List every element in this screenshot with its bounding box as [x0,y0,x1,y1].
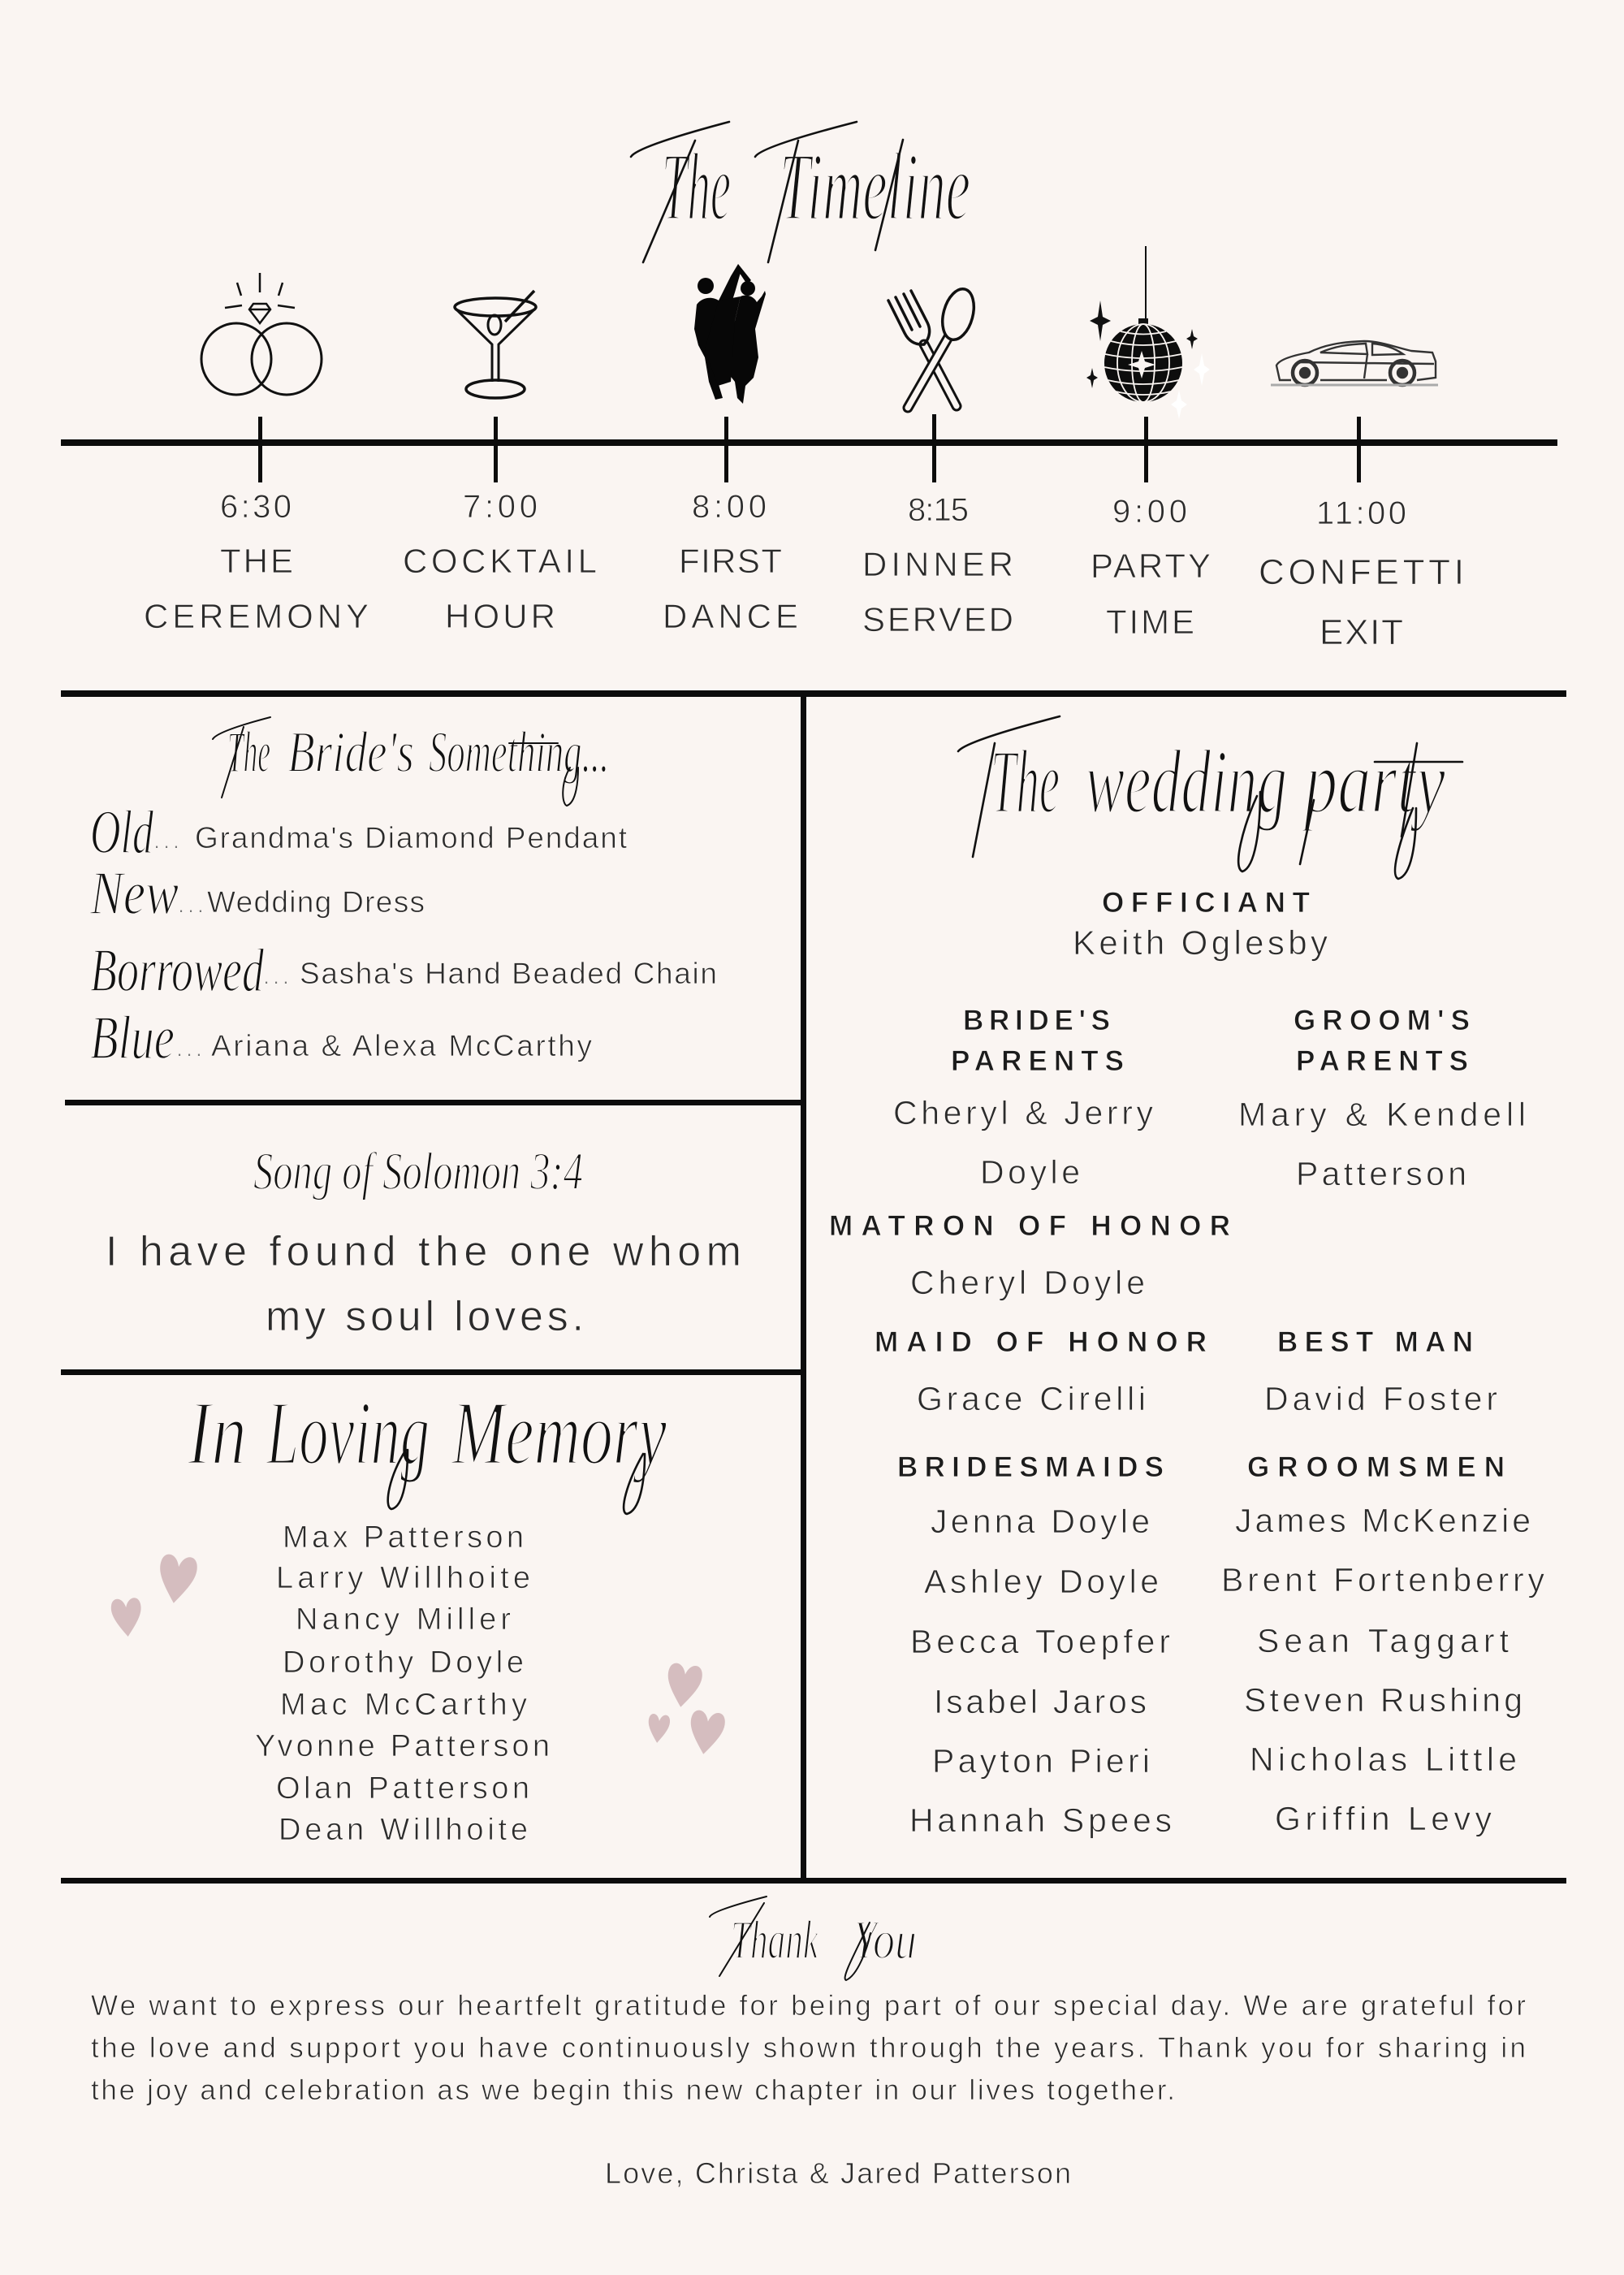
icon: hearts right [646,1662,726,1757]
bridesmaids: Ashley Doyle [924,1563,1159,1600]
heading: The Bride's Something: Bride's [287,720,414,785]
verse text [106,1228,741,1340]
groomsmen: Nicholas Little [1250,1741,1517,1778]
timeline label: first dance [663,489,798,635]
title: The Timeline: Timeline [780,132,970,240]
officiant: Keith Oglesby [1073,923,1328,962]
timeline label: first dance: DANCE [663,597,798,635]
bride's parents: Cheryl & Jerry [893,1094,1153,1131]
timeline label: party time: PARTY [1091,547,1211,585]
panel: the bride's something [89,717,717,1072]
title: The Timeline: The [662,132,731,240]
bridesmaids: Payton Pieri [932,1742,1150,1780]
bridesmaids [897,1451,1172,1839]
panel: thank you [91,1897,1526,2190]
heading: The wedding party: wedding [1085,732,1287,833]
groom's parents: Mary & Kendell [1238,1096,1526,1133]
panel: the wedding party [829,716,1544,1839]
row: old: ... [154,832,179,852]
timeline label: ceremony: THE [220,542,293,580]
best man: David Foster [1264,1380,1497,1417]
panel: scripture [106,1142,741,1340]
names list: Dean Willhoite [279,1813,528,1847]
groomsmen [1221,1451,1544,1837]
row: new: Wedding Dress [207,885,425,919]
names list: Mac McCarthy [280,1688,527,1722]
maid of honor: MAID OF HONOR [875,1326,1207,1358]
bride's parents: PARENTS [951,1045,1124,1077]
row: borrowed [90,936,717,1005]
heading: The Bride's Something: Something... [429,720,609,785]
names list [255,1520,550,1847]
heading: Thank You: You [853,1909,917,1970]
groom's parents [1238,1005,1526,1192]
timeline label: cocktail hour: HOUR [445,597,555,635]
row: blue: Ariana & Alexa McCarthy [211,1029,593,1062]
groom's parents: GROOM'S [1294,1005,1470,1036]
timeline label: first dance: 8:00 [692,489,767,525]
row: new: New [89,859,179,928]
row: blue: ... [177,1040,201,1060]
timeline label: ceremony [144,489,369,635]
icon: wedding rings [201,273,322,395]
thank you paragraph: We want to express our heartfelt gratitude for being part of our special day. We are grateful for [91,1990,1526,2022]
icon: martini glass [455,291,536,398]
heading: Song of Solomon: Song of Solomon 3:4 [253,1142,583,1201]
heading: In Loving Memory: In [187,1383,247,1484]
heading: The wedding party: party [1300,732,1445,833]
timeline axis [61,414,1557,482]
heading: In Loving Memory: Loving [266,1383,430,1484]
groomsmen: Sean Taggart [1257,1622,1510,1659]
timeline label: party time: TIME [1106,603,1194,641]
timeline label: dinner served: DINNER [862,545,1013,583]
timeline label: confetti exit [1259,495,1464,652]
row: borrowed: Borrowed [90,936,265,1005]
best man [1264,1326,1497,1417]
maid of honor [875,1326,1207,1417]
groom's parents: Patterson [1296,1155,1466,1192]
thank you paragraph: the love and support you have continuously shown through the years. Thank you for sharing in [91,2032,1526,2064]
officiant [1073,887,1328,962]
bride's parents: Doyle [980,1153,1080,1191]
heading: The Bride's Something [213,717,609,806]
matron of honor [829,1210,1230,1301]
bridesmaids: Hannah Spees [909,1801,1172,1839]
groom's parents: PARENTS [1296,1045,1468,1077]
timeline label: cocktail hour [403,489,597,635]
row: borrowed: ... [264,967,288,988]
names list: Dorothy Doyle [283,1646,524,1680]
heading: In Loving Memory: Memory [451,1383,667,1484]
signature: Love, Christa & Jared Patterson [605,2156,1071,2190]
heading: The wedding party: The [991,732,1060,833]
timeline label: party time [1091,494,1211,641]
panel: in loving memory [110,1383,726,1847]
matron of honor: Cheryl Doyle [910,1264,1145,1301]
officiant: OFFICIANT [1102,887,1310,919]
heading: Thank You [710,1897,917,1980]
best man: BEST MAN [1277,1326,1473,1358]
timeline label: ceremony: 6:30 [220,489,292,525]
timeline label: confetti exit: EXIT [1320,612,1403,652]
row: new: ... [179,896,203,916]
row: old: Old [90,798,154,867]
icon: disco ball [1086,246,1210,419]
heading: In Loving Memory [187,1383,667,1514]
matron of honor: MATRON OF HONOR [829,1210,1230,1242]
bridesmaids: BRIDESMAIDS [897,1451,1164,1483]
groomsmen: Brent Fortenberry [1221,1561,1544,1598]
names list: Larry Willhoite [276,1561,530,1595]
timeline label: cocktail hour: 7:00 [463,489,538,525]
row: old [90,798,628,867]
row: blue [90,1004,593,1072]
bridesmaids: Jenna Doyle [931,1503,1150,1540]
groomsmen: Steven Rushing [1244,1681,1522,1719]
heading: Thank You: Thank [731,1909,819,1970]
groomsmen: Griffin Levy [1275,1800,1492,1837]
maid of honor: Grace Cirelli [917,1380,1146,1417]
bride's parents [893,1005,1153,1191]
timeline label: party time: 9:00 [1112,494,1187,530]
icon: hearts left [110,1553,199,1637]
timeline label: dinner served: SERVED [862,600,1013,638]
verse text: I have found the one whom [106,1228,741,1275]
panel frame lines [61,690,1566,1884]
groomsmen: James McKenzie [1235,1502,1531,1539]
timeline label: ceremony: CEREMONY [144,597,369,635]
names list: Olan Patterson [276,1771,529,1806]
bridesmaids: Becca Toepfer [910,1623,1170,1660]
bride's parents: BRIDE'S [963,1005,1110,1036]
icon: fork and spoon [888,285,979,408]
row: borrowed: Sasha's Hand Beaded Chain [300,957,717,990]
thank you paragraph: the joy and celebration as we begin this new chapter in our lives together. [91,2074,1175,2106]
heading: The wedding party [958,716,1462,879]
timeline label: dinner served [862,492,1013,638]
names list: Max Patterson [283,1520,524,1555]
icon: getaway car [1271,341,1438,385]
names list: Nancy Miller [296,1602,511,1637]
bridesmaids: Isabel Jaros [934,1683,1147,1720]
verse text: my soul loves. [266,1293,584,1340]
timeline label: confetti exit: CONFETTI [1259,552,1464,592]
timeline label: cocktail hour: COCKTAIL [403,542,597,580]
timeline label: dinner served: 8:15 [908,492,969,528]
timeline label: confetti exit: 11:00 [1316,495,1406,531]
thank you paragraph [91,1990,1526,2106]
row: blue: Blue [90,1004,175,1072]
title: The Timeline [631,122,970,262]
row: new [89,859,425,928]
icon: first dance silhouette [694,264,766,404]
timeline label: first dance: FIRST [679,542,782,580]
heading: The Bride's Something: The [227,720,270,785]
names list: Yvonne Patterson [255,1729,550,1763]
groomsmen: GROOMSMEN [1247,1451,1505,1483]
row: old: Grandma's Diamond Pendant [195,821,628,854]
